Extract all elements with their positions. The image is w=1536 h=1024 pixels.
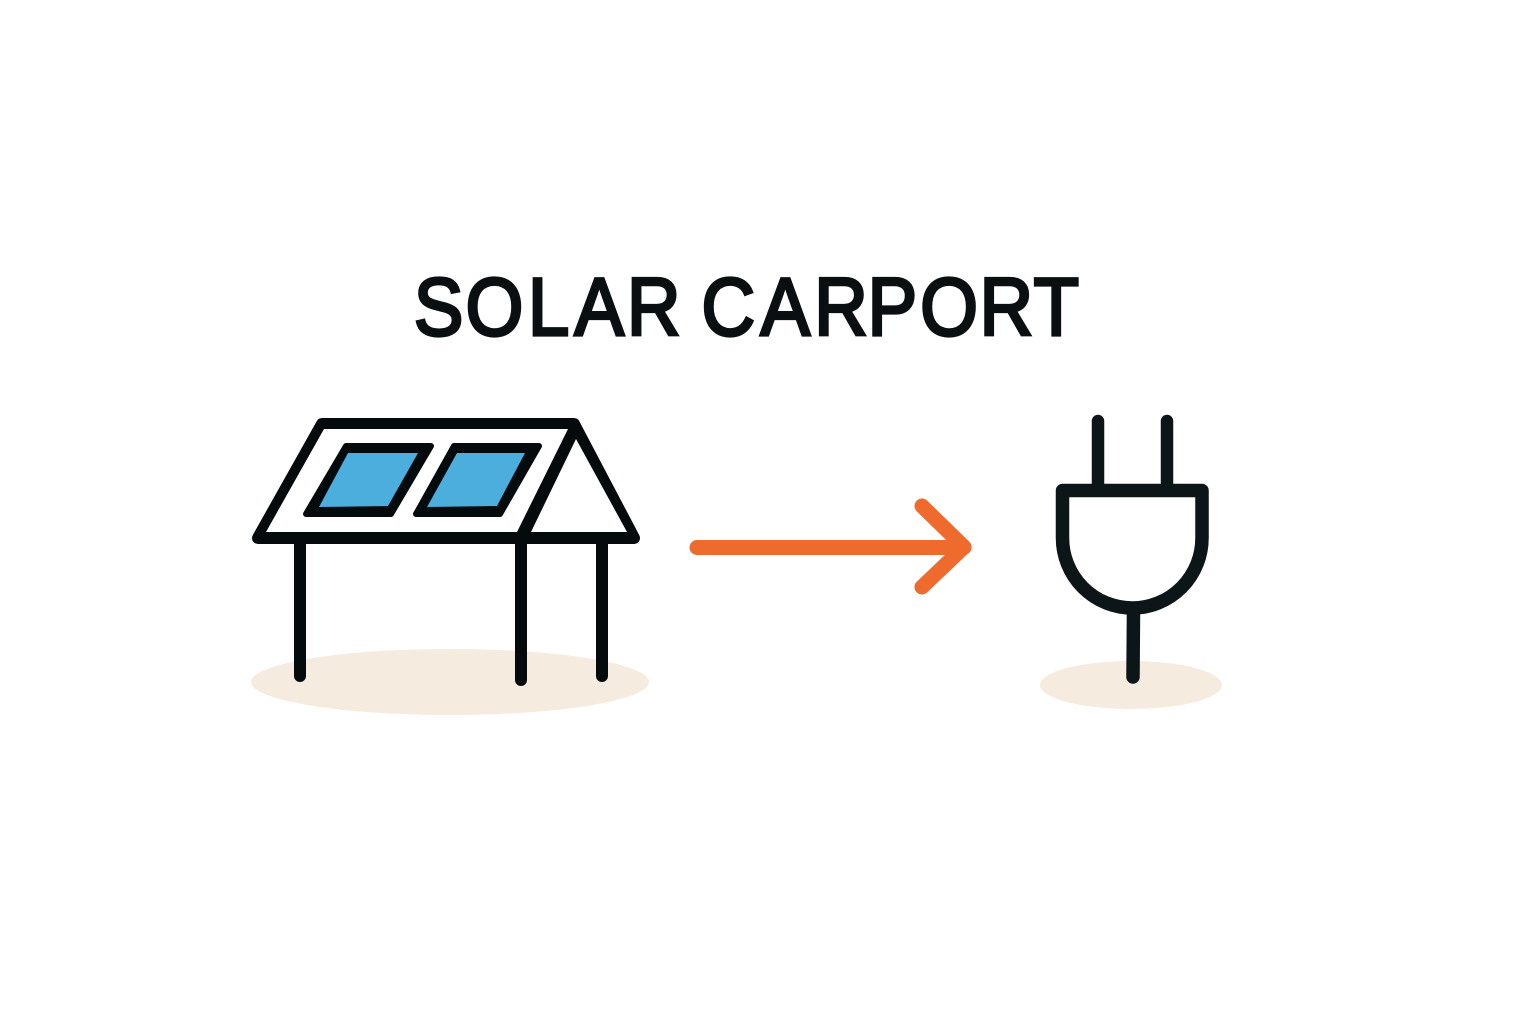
icon: solar carport [251,424,649,715]
plug body [1062,490,1202,608]
title: SOLAR CARPORT [414,261,1079,353]
plug prongs [1098,421,1167,490]
plug cord [1126,610,1140,677]
plug ground shadow [1040,661,1222,709]
carport ground shadow [251,649,649,715]
carport roof [258,424,634,538]
solar panel left [306,446,431,514]
icon: plug [1040,421,1222,709]
carport posts [300,537,602,680]
solar panel right [416,446,539,514]
arrow [697,506,964,587]
